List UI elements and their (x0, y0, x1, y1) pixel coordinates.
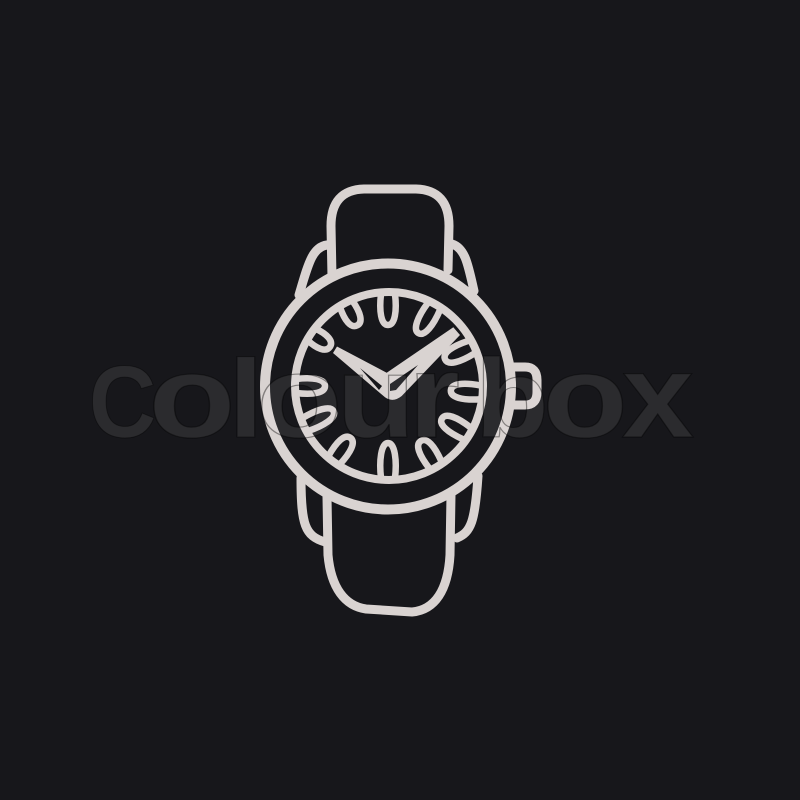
watermark: Colourbox: o (542, 332, 628, 462)
clock hands (333, 327, 460, 400)
bottom strap (327, 495, 451, 612)
watermark: Colourbox: u (336, 332, 415, 463)
winding crown (513, 367, 537, 405)
outer bezel (265, 264, 511, 510)
watermark: Colourbox: C (89, 344, 156, 459)
watermark: Colourbox: b (475, 337, 549, 461)
watermark: Colourbox: r (408, 328, 460, 463)
top strap (331, 189, 449, 277)
watermark: Colourbox: x (622, 329, 694, 463)
bottom lugs (301, 476, 478, 542)
icon: wristwatch (265, 189, 537, 612)
watermark: Colourbox: o (148, 331, 236, 462)
watermark: Colourbox: l (228, 337, 264, 461)
watermark: Colourbox (89, 328, 694, 463)
dial ring (295, 292, 483, 480)
top lugs (299, 244, 474, 295)
hour markers (296, 294, 480, 478)
watermark: Colourbox: o (256, 332, 342, 462)
